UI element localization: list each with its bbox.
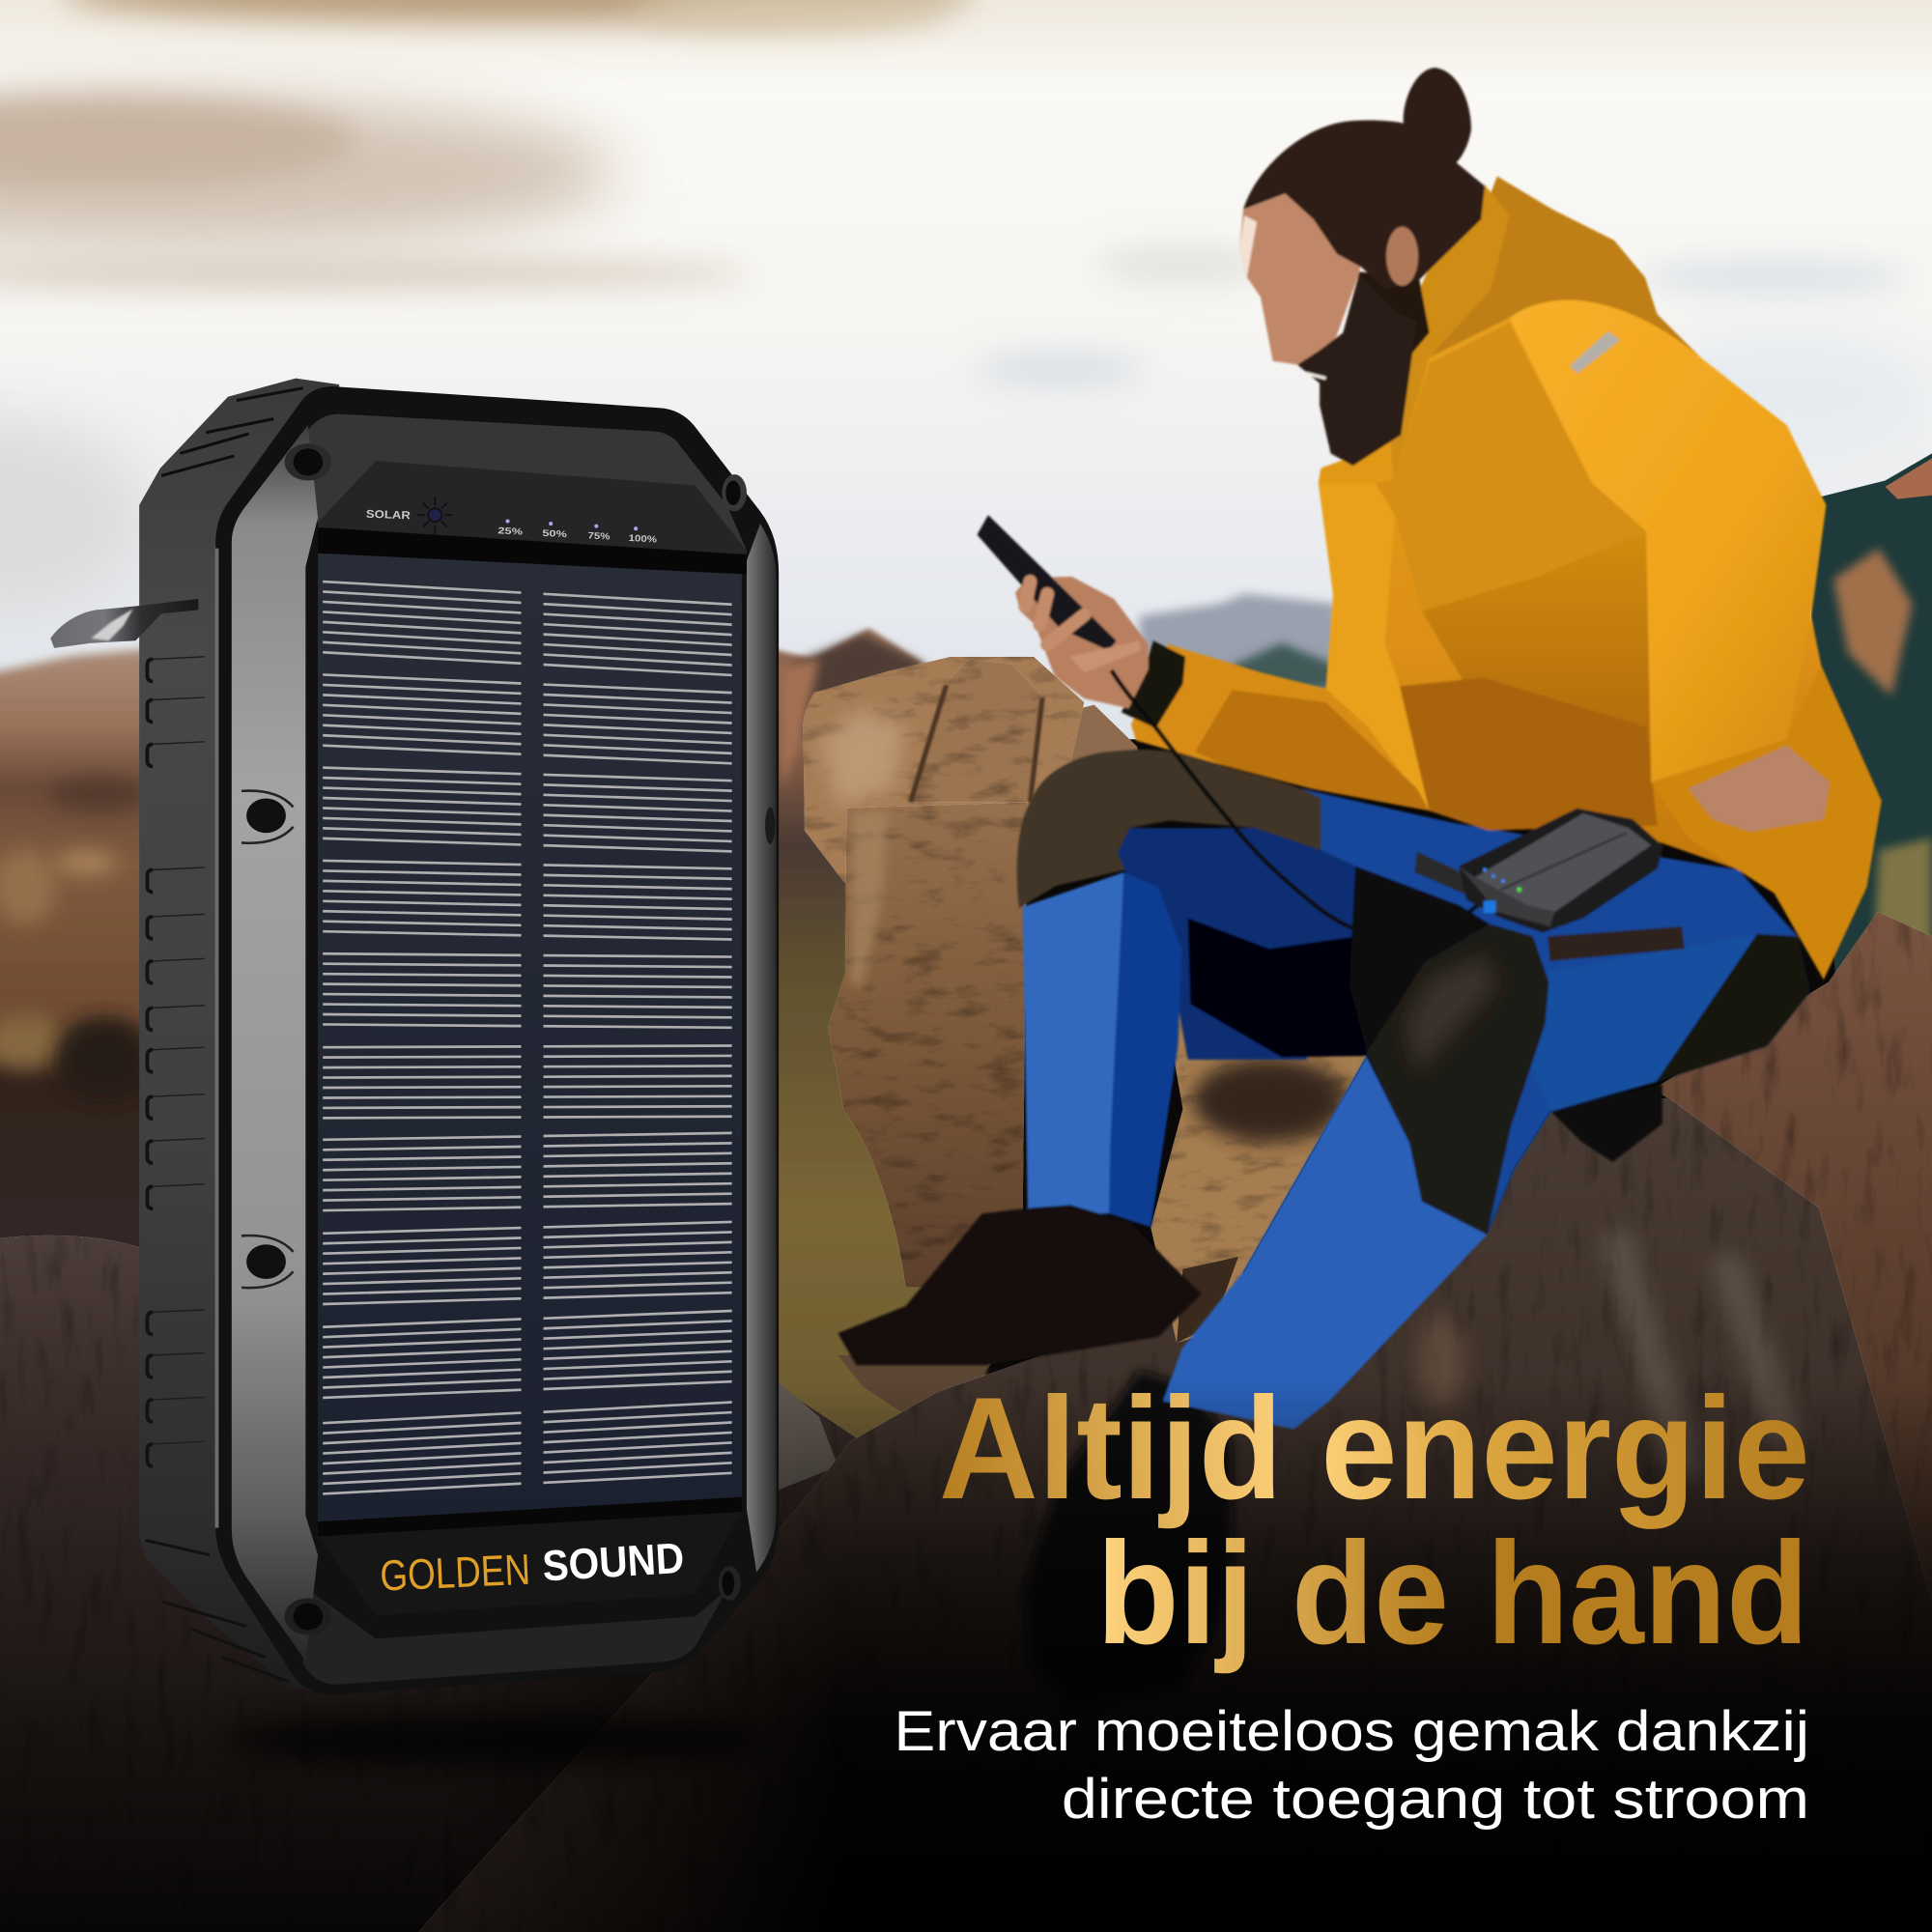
right edge rail xyxy=(747,524,777,1573)
jacket body xyxy=(1131,318,1882,980)
grip slots xyxy=(147,657,205,1466)
side strap xyxy=(50,599,198,648)
distant mountains right xyxy=(764,594,1337,1466)
status labels: SOLAR xyxy=(366,509,412,522)
solar power bank product xyxy=(50,379,779,1694)
upper sleeve xyxy=(1509,300,1826,782)
centre boulder crevice xyxy=(911,685,1042,802)
hand on hip xyxy=(1688,746,1830,832)
front thigh navy xyxy=(1118,828,1355,1060)
charging cable xyxy=(1112,670,1479,939)
bottom dark fade xyxy=(487,1395,1932,1932)
cuff xyxy=(1122,640,1185,728)
mouth xyxy=(1306,373,1325,379)
jacket lower chest xyxy=(1422,531,1651,773)
logo plate xyxy=(318,1512,742,1615)
headline: Altijd energie xyxy=(939,1367,1810,1529)
distant mountains left xyxy=(0,648,160,1282)
subheading: Ervaar moeiteloos gemak dankzij xyxy=(894,1700,1809,1763)
rear boulder light patch xyxy=(819,708,906,807)
rear thigh xyxy=(1301,788,1810,1235)
logo: GOLDEN xyxy=(379,1547,531,1601)
subheading: directe toegang tot stroom xyxy=(1062,1768,1809,1831)
thigh strap xyxy=(1548,926,1685,961)
stone near device xyxy=(777,1380,838,1491)
thumb xyxy=(1069,640,1141,672)
big dark rock xyxy=(419,1097,1932,1932)
jacket placket xyxy=(1319,483,1430,810)
corner ribs bottom xyxy=(146,1540,290,1682)
centre boulder xyxy=(911,659,1041,802)
shadow under thigh xyxy=(1551,1084,1662,1162)
right brown rock xyxy=(1651,912,1932,1725)
jacket upper chest xyxy=(1375,323,1646,616)
ear xyxy=(1386,227,1418,286)
back housing xyxy=(139,379,370,1694)
black trim xyxy=(318,527,747,574)
shadow behind shin xyxy=(1188,918,1368,1057)
hair xyxy=(1243,68,1485,290)
rock below front shoe xyxy=(838,1355,998,1417)
status labels: 75% xyxy=(587,530,611,543)
face xyxy=(1239,193,1368,384)
subheading xyxy=(894,1700,1809,1831)
front block xyxy=(828,802,1028,1288)
fingers xyxy=(1025,582,1084,644)
rear black panel xyxy=(1656,934,1810,1082)
bottom cap xyxy=(303,1589,727,1685)
status labels: 25% xyxy=(497,526,524,538)
top cap xyxy=(305,414,747,551)
jacket collar xyxy=(1390,185,1509,480)
right mountain xyxy=(1811,453,1932,985)
corner ribs top xyxy=(161,388,303,475)
status leds xyxy=(505,520,638,530)
status labels xyxy=(366,509,658,546)
jacket back lower xyxy=(1651,666,1882,980)
clouds xyxy=(0,0,1932,616)
shoe rear xyxy=(1023,1370,1233,1707)
bezel highlight xyxy=(215,549,218,1528)
jacket hood xyxy=(1430,176,1700,357)
sleeve patch xyxy=(1570,331,1620,373)
jacket pocket xyxy=(1400,678,1658,831)
small power bank xyxy=(1414,809,1663,933)
logo xyxy=(379,1535,686,1601)
person xyxy=(838,68,1882,1707)
knee patch lower xyxy=(1367,924,1548,1235)
device shadow xyxy=(222,1713,764,1767)
forearm xyxy=(1131,644,1430,810)
boulders xyxy=(803,657,1146,1288)
background: sky xyxy=(0,0,1932,739)
black trim bottom xyxy=(318,1497,742,1537)
rock under the leg xyxy=(1151,1005,1374,1343)
black panel on thigh xyxy=(1350,867,1490,1052)
solar panel xyxy=(318,554,742,1521)
front bezel xyxy=(215,386,779,1694)
headline: bij de hand xyxy=(1096,1512,1808,1674)
third boulder xyxy=(1037,705,1146,788)
lower leg xyxy=(1163,1056,1488,1430)
screws xyxy=(242,443,775,1635)
solar cell lines xyxy=(323,582,732,1493)
silver side rail xyxy=(232,425,318,1661)
phone xyxy=(977,515,1117,650)
hand holding phone xyxy=(1015,577,1149,708)
shoe front xyxy=(838,1205,1202,1365)
status labels: 100% xyxy=(628,533,658,546)
shin xyxy=(1023,872,1181,1227)
solar sun icon xyxy=(417,497,452,535)
beard xyxy=(1297,273,1417,466)
foreground ground left xyxy=(0,1236,887,1932)
neck shadow xyxy=(1355,271,1430,370)
top label plate xyxy=(318,461,747,557)
knee patch upper xyxy=(1017,750,1321,908)
logo: SOUND xyxy=(541,1535,686,1590)
status labels: 50% xyxy=(542,528,568,540)
headline xyxy=(939,1367,1810,1674)
front block light edge xyxy=(850,810,887,985)
forehead highlight xyxy=(1239,215,1257,277)
rear boulder xyxy=(803,657,1084,887)
